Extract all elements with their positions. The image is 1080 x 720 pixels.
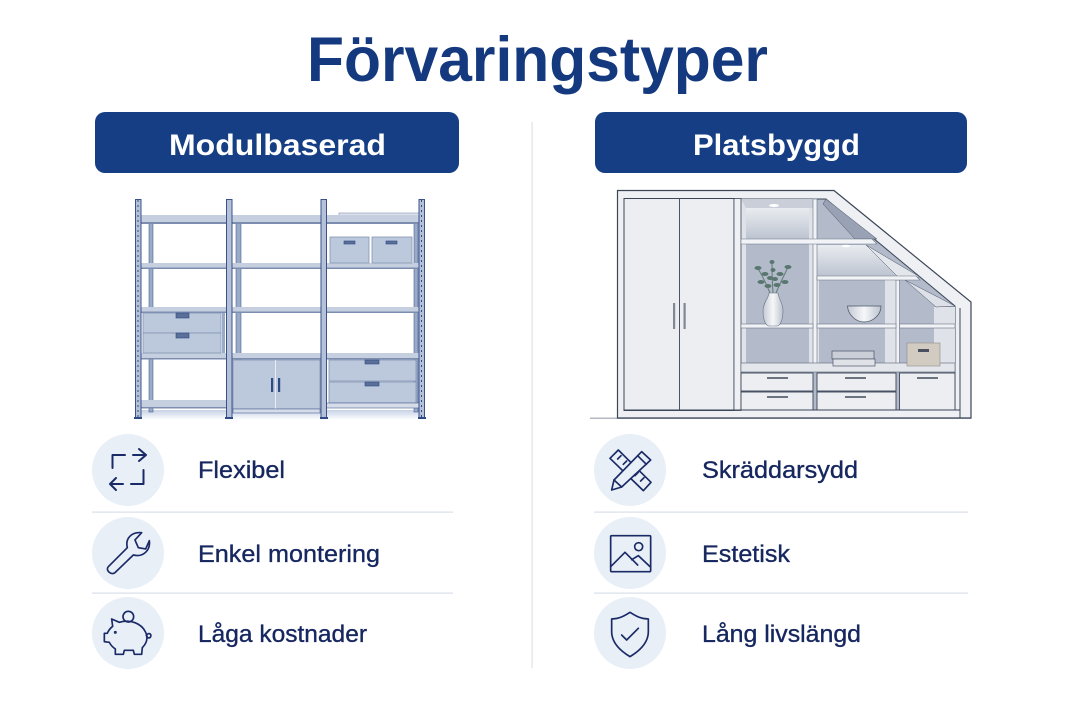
feature: Enkel montering: Enkel montering — [198, 541, 380, 568]
panel: Modulbaserad — [92, 112, 459, 669]
icon: ruler and pencil — [610, 450, 651, 491]
panel: Platsbyggd — [590, 112, 971, 669]
storage boxes — [330, 237, 412, 263]
box — [907, 343, 940, 366]
niche side walls — [741, 199, 955, 363]
column divider — [532, 122, 533, 668]
heading: Platsbyggd — [595, 112, 967, 173]
heading: Platsbyggd: Platsbyggd — [693, 129, 860, 162]
feature: Estetisk — [594, 517, 791, 589]
sloped soffit — [823, 199, 955, 307]
right drawers — [326, 360, 419, 408]
icon: flexible arrows — [110, 449, 146, 490]
icon: piggy bank — [104, 611, 151, 654]
bowl — [848, 306, 881, 322]
feature: Låga kostnader — [92, 597, 367, 669]
feature: Lång livslängd — [594, 597, 861, 669]
feature: Skräddarsydd: Skräddarsydd — [702, 457, 858, 484]
heading: Modulbaserad: Modulbaserad — [169, 129, 386, 162]
illustration: modular shelving — [134, 200, 426, 420]
feature: Estetisk: Estetisk — [702, 541, 791, 568]
shelves — [741, 239, 955, 372]
feature: Flexibel: Flexibel — [198, 457, 285, 484]
vase with plant — [754, 260, 792, 326]
feature: Låga kostnader: Låga kostnader — [198, 621, 367, 648]
feature: Enkel montering — [92, 517, 380, 589]
books — [832, 351, 875, 366]
heading: Modulbaserad — [95, 112, 459, 173]
title: Förvaringstyper — [307, 25, 768, 95]
illustration: built-in storage — [590, 190, 971, 419]
left drawers — [143, 313, 225, 353]
feature: Skräddarsydd — [594, 434, 858, 506]
feature: Flexibel — [92, 434, 285, 506]
cabinet — [233, 360, 320, 413]
icon: wrench — [107, 533, 149, 574]
drawers — [741, 373, 955, 410]
icon: shield check — [612, 612, 648, 657]
icon: picture — [611, 536, 651, 572]
feature: Lång livslängd: Lång livslängd — [702, 621, 861, 648]
wardrobe — [624, 198, 734, 410]
